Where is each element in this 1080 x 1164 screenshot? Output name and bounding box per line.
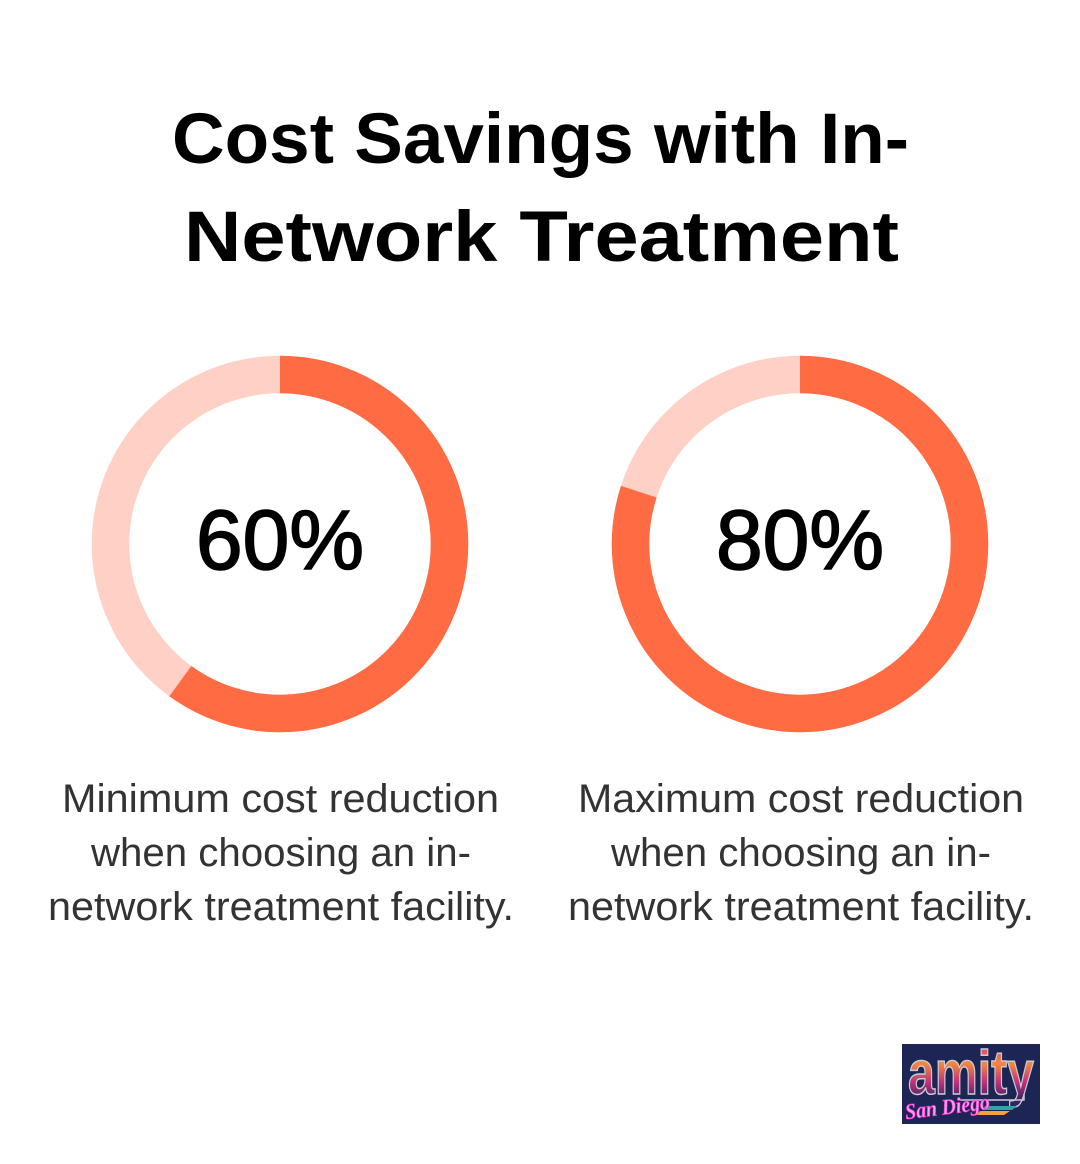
logo: Amity San Diego: amity	[908, 1039, 1034, 1108]
donut chart: 60%	[110, 374, 450, 714]
title: Cost Savings with In-	[172, 100, 909, 179]
caption: maximum: network treatment facility.	[568, 885, 1034, 929]
value: 80%: 80%	[716, 493, 884, 587]
logo: Amity San Diego: San Diego	[904, 1089, 991, 1124]
donut chart: 80%	[630, 374, 970, 714]
caption: minimum: network treatment facility.	[48, 885, 514, 929]
panel: maximum cost reduction	[568, 374, 1034, 929]
value: 60%: 60%	[196, 493, 364, 587]
caption: maximum: Maximum cost reduction	[578, 777, 1024, 821]
title	[172, 100, 909, 277]
caption: minimum: when choosing an in-	[90, 831, 471, 875]
caption: maximum: when choosing an in-	[610, 831, 991, 875]
panel: minimum cost reduction	[48, 374, 514, 929]
caption: minimum: Minimum cost reduction	[62, 777, 499, 821]
logo: Amity San Diego	[902, 1039, 1040, 1124]
caption: minimum	[48, 777, 514, 929]
caption: maximum	[568, 777, 1034, 929]
title: Network Treatment	[184, 198, 899, 277]
